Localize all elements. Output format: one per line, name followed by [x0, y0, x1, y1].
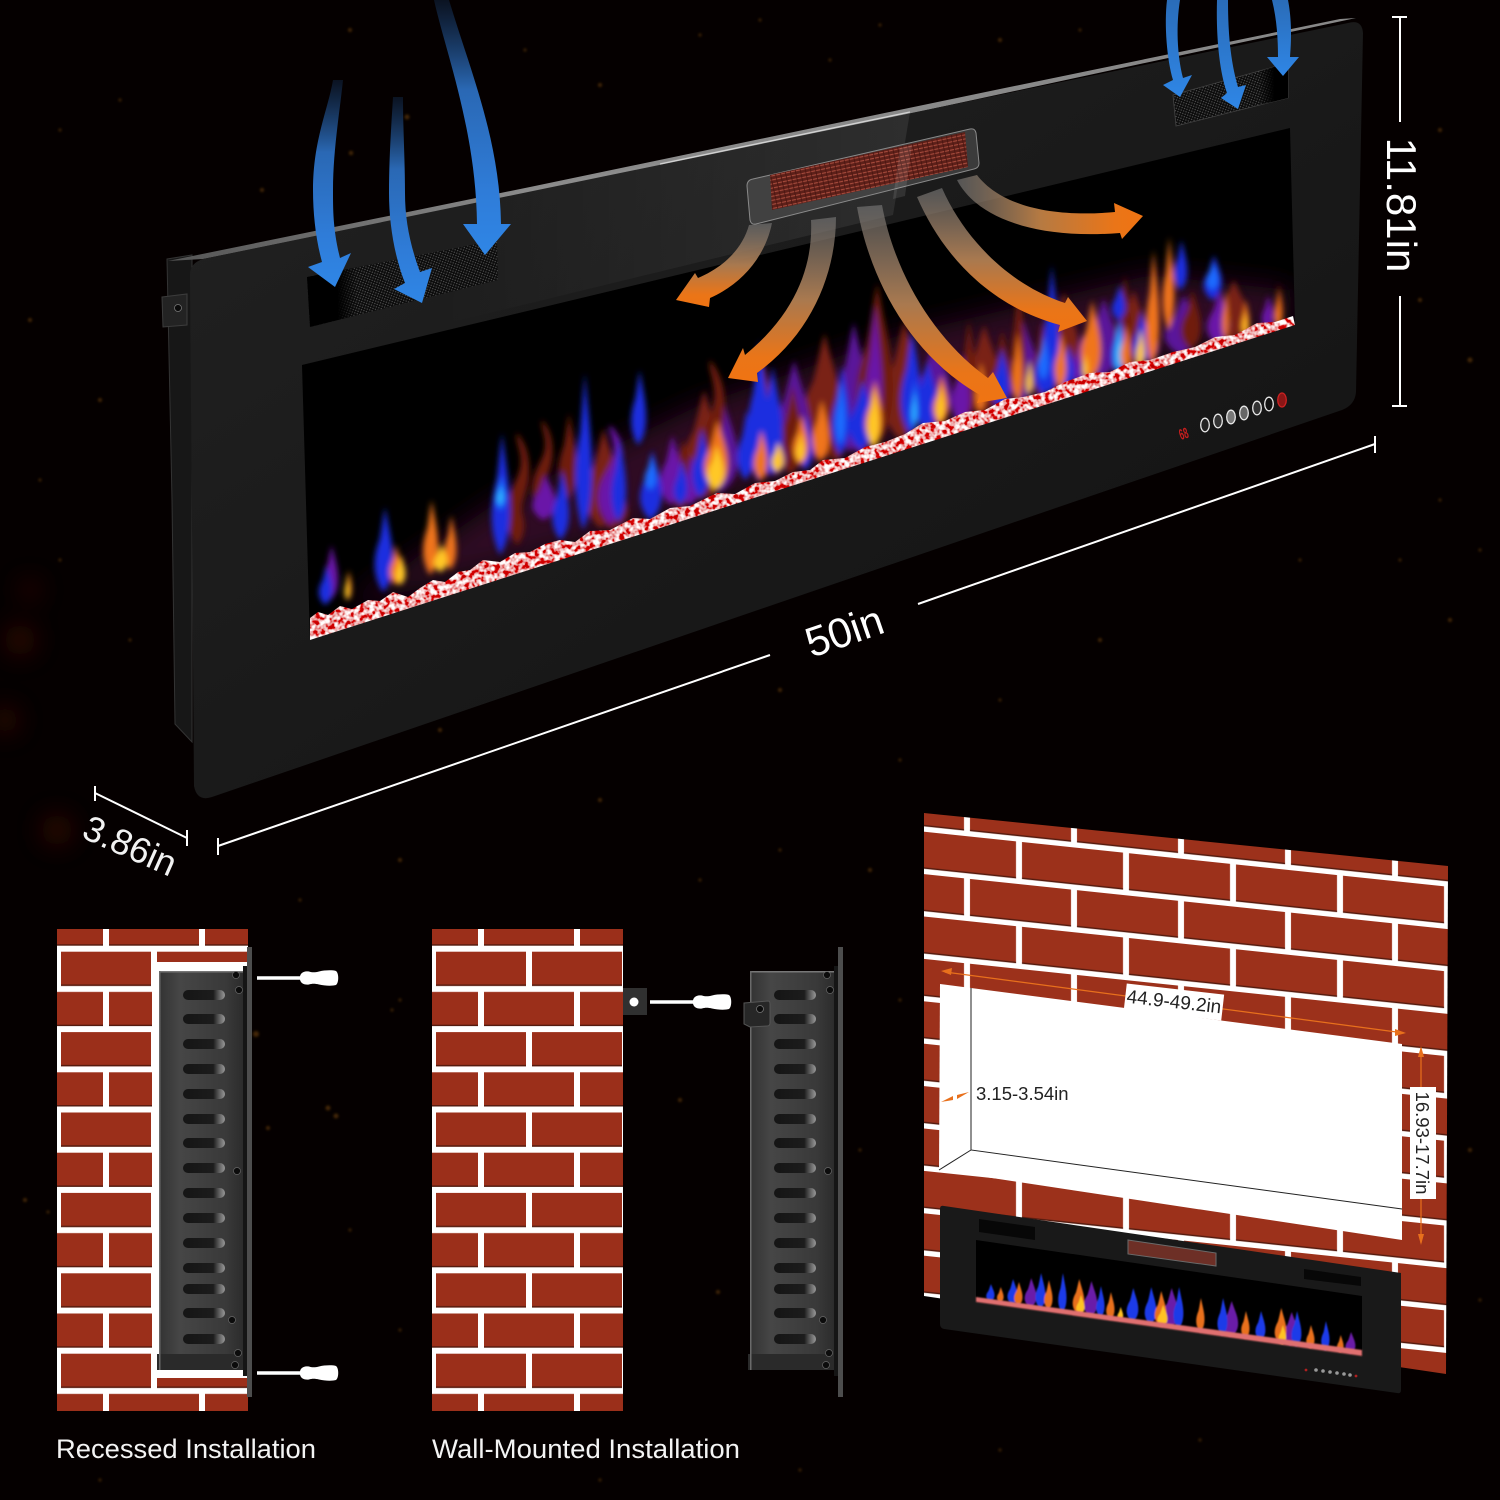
small flames [986, 1273, 1355, 1354]
wall recess [152, 962, 248, 1378]
wall bracket [623, 988, 647, 1015]
dimension: height 11.81in [1378, 17, 1425, 406]
mounting bracket [162, 294, 187, 327]
glass highlight line [660, 112, 910, 164]
flames: orange layer [345, 237, 1282, 600]
heater element [747, 129, 979, 224]
label: wall-mounted installation: Wall-Mounted Installation [432, 1434, 740, 1464]
warm air outflow arrows (orange) [676, 175, 1143, 403]
flames: broad purple back layer [705, 295, 1198, 492]
air vent: left [307, 240, 498, 327]
dimension: height 11.81in: 11.81in [1378, 138, 1425, 272]
screwdriver: bottom [257, 1365, 338, 1381]
height arrow [1418, 1046, 1424, 1245]
front glass panel [190, 22, 1363, 798]
side bracket [744, 1001, 770, 1027]
firebox window [302, 128, 1295, 640]
flame glow underlay [340, 275, 1292, 610]
main fireplace [162, 18, 1363, 798]
flames: dark red layer [506, 275, 1283, 545]
small fireplace [940, 1206, 1401, 1393]
fireplace back panel [157, 947, 252, 1397]
glass reflection [440, 112, 910, 325]
small fireplace panel [940, 1206, 1401, 1393]
width label: 44.9-49.2in [1126, 987, 1222, 1018]
top edge of glass [168, 18, 1356, 261]
dimension: width 50in [218, 436, 1375, 855]
background ember glows [0, 580, 73, 846]
flames: broad red back layer [585, 280, 1248, 528]
dimension: depth 3.86in: 3.86in [77, 807, 183, 884]
cool air inflow arrows (blue) [308, 0, 1299, 303]
flames: bright blue accents [495, 262, 1218, 510]
small vents [979, 1219, 1361, 1286]
fireplace side body [167, 255, 192, 742]
crystal ember bed [310, 316, 1295, 640]
flames: blue layer [319, 240, 1222, 605]
perspective brick wall [924, 813, 1448, 1374]
flames: cyan accents [497, 322, 1122, 505]
brick wall [432, 929, 623, 1411]
recess cutout diagram [924, 813, 1448, 1393]
depth arrows [941, 1092, 969, 1102]
fireplace back panel [748, 947, 843, 1397]
label: recessed installation: Recessed Installation [56, 1434, 316, 1464]
flames: purple layer [323, 290, 1273, 600]
dimension: width 50in: 50in [799, 596, 889, 666]
flames: yellow layer [345, 310, 1247, 600]
control panel [1177, 393, 1286, 444]
brick wall [57, 929, 248, 1411]
recessed installation diagram [57, 929, 338, 1411]
screwdriver: top [257, 970, 338, 986]
air vent: right [1173, 63, 1288, 126]
small controls [1305, 1368, 1357, 1377]
flames [319, 237, 1283, 605]
small ember bed [976, 1297, 1362, 1356]
depth label: 3.15-3.54in [976, 1083, 1069, 1104]
recess opening [939, 984, 1402, 1240]
width arrow [941, 968, 1406, 1036]
height label: 16.93-17.7in [1412, 1092, 1433, 1194]
small firebox window [976, 1240, 1362, 1356]
wall-mounted installation diagram [432, 929, 843, 1411]
display digits: 68 [1177, 424, 1191, 444]
small heater [1128, 1240, 1216, 1266]
screwdriver [650, 994, 731, 1010]
